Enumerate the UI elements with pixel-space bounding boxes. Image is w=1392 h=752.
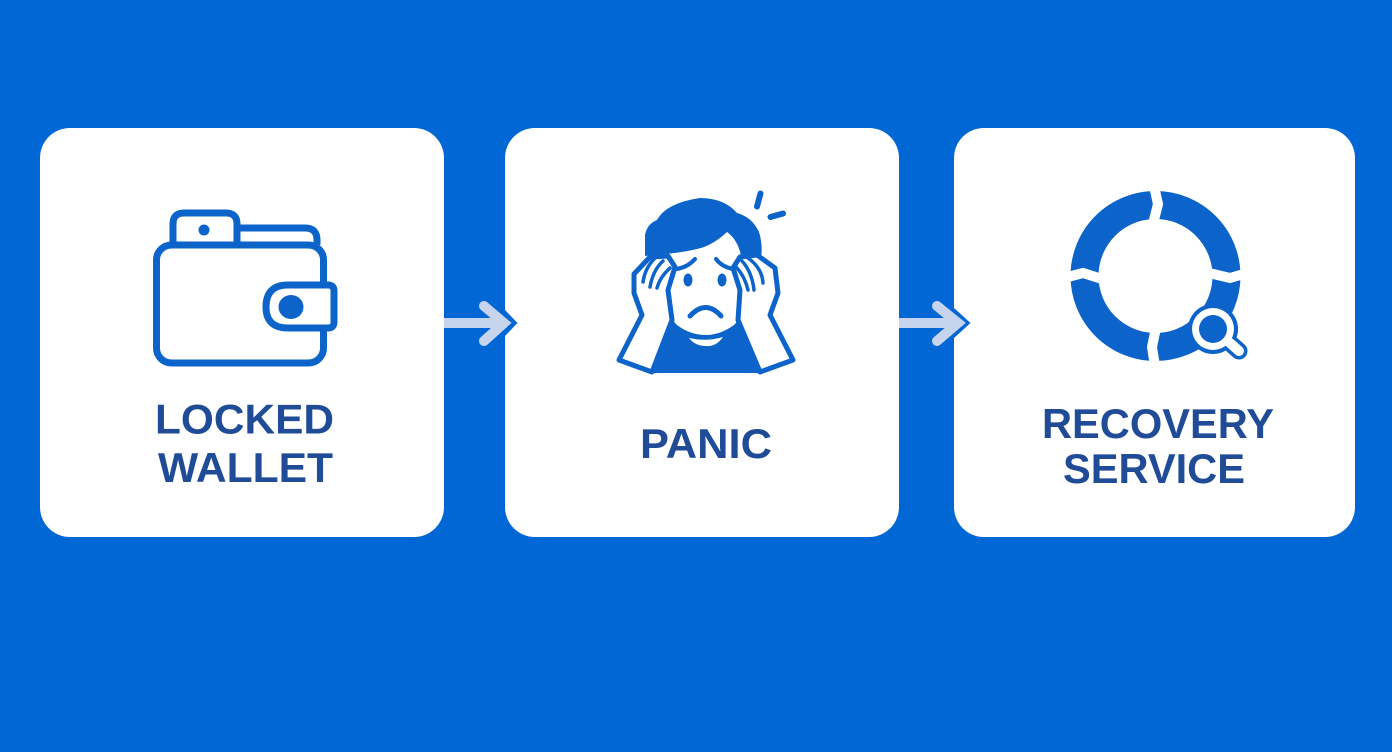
icon: segmented ring with magnifier — [1064, 186, 1247, 366]
brows and mouth — [677, 259, 733, 316]
label: locked wallet — [155, 396, 334, 491]
hair — [645, 198, 762, 258]
finger lines — [643, 258, 763, 290]
arrow: panic to recovery — [899, 306, 970, 341]
arrow: wallet to panic — [444, 306, 518, 341]
label: panic: PANIC — [640, 420, 772, 467]
magnifier — [1188, 304, 1239, 354]
smile highlight — [689, 337, 723, 346]
eyes — [684, 274, 726, 286]
panel: recovery service — [954, 128, 1355, 537]
shoulders — [652, 322, 760, 373]
label: recovery service: SERVICE — [1063, 445, 1245, 492]
icon: panicked person — [619, 194, 793, 373]
label: recovery service: RECOVERY — [1042, 400, 1274, 447]
label: locked wallet: WALLET — [158, 444, 333, 491]
card background — [40, 128, 444, 537]
left arm and hand — [619, 256, 675, 372]
ring gaps — [1064, 186, 1247, 366]
ring — [1084, 205, 1226, 347]
icon: wallet — [156, 213, 334, 363]
label: recovery service — [1042, 400, 1274, 492]
panel: locked wallet — [40, 128, 444, 537]
face — [664, 245, 744, 335]
card background — [505, 128, 899, 537]
surprise marks — [757, 194, 783, 217]
label: locked wallet: LOCKED — [155, 396, 334, 442]
card background — [954, 128, 1355, 537]
right arm and hand — [733, 255, 793, 372]
panel: panic — [505, 128, 899, 537]
